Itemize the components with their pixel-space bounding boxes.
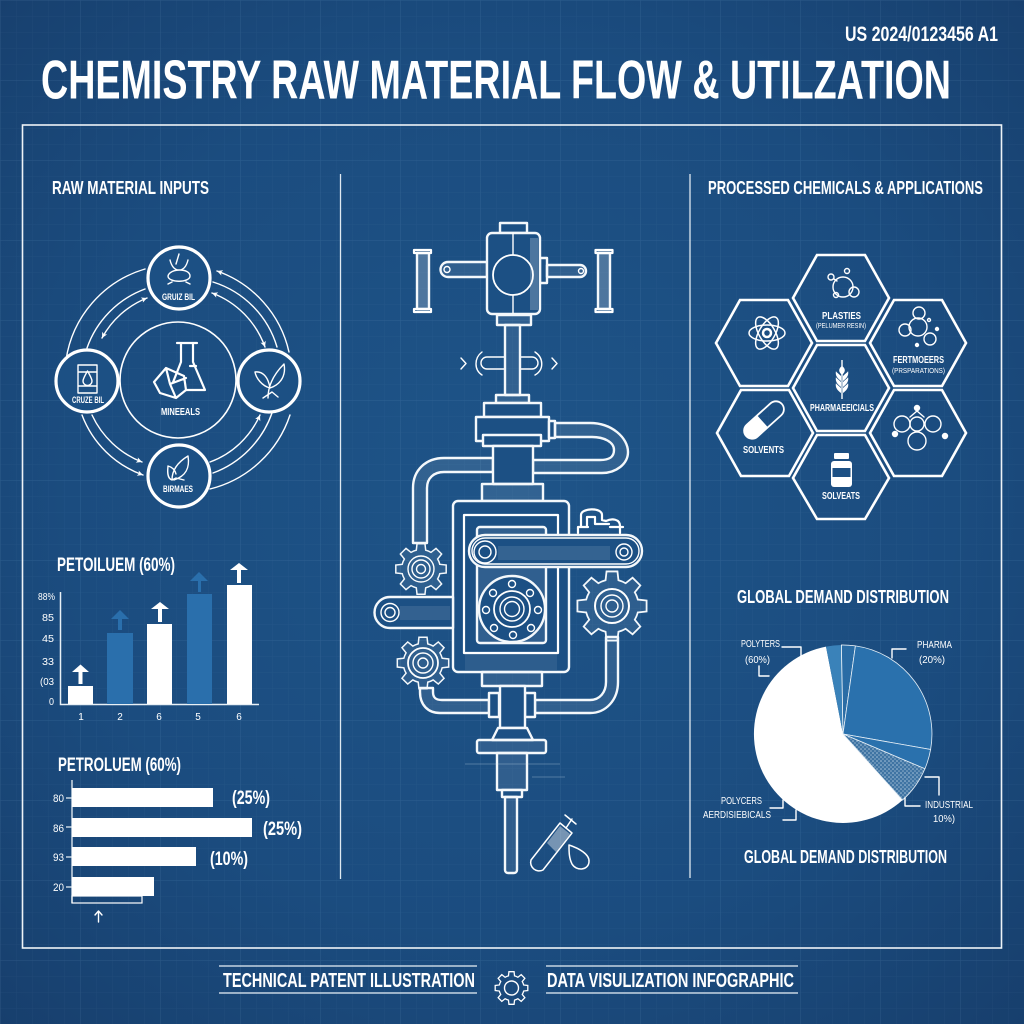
column divider left: [340, 174, 342, 879]
label: top node: GRUIZ BIL: [162, 292, 195, 302]
icon: flower atom: [168, 254, 190, 284]
neck column: [493, 446, 533, 484]
value labels: (10%): [210, 849, 248, 870]
axis labels: 20: [53, 882, 64, 894]
side columns: [414, 250, 612, 312]
y axis labels: 85: [42, 613, 54, 624]
slice: light blue: [826, 645, 843, 734]
label: industrial: 10%): [933, 813, 955, 825]
left belt: [374, 597, 453, 628]
central circle: minerals: [120, 322, 236, 438]
y axis labels: 33: [42, 657, 54, 668]
panel: raw material inputs: [52, 177, 300, 507]
label: polycers: [703, 795, 771, 821]
slice: small blue: [841, 645, 855, 734]
icon: test tube: [531, 815, 576, 871]
value labels: (25%): [232, 788, 270, 809]
column divider right: [689, 174, 691, 878]
gear: right: [577, 571, 647, 641]
outlined small bar: [72, 896, 142, 903]
lower column: [477, 672, 546, 873]
hex: solvents bottle: [793, 435, 889, 519]
label: left node: CRUZE BIL: [72, 395, 104, 405]
slice: hatched industrial: [843, 734, 925, 800]
label: polycers: AERDISIEBICALS: [703, 809, 771, 821]
cycle diagram: [56, 247, 300, 507]
bars: [72, 788, 252, 896]
axis labels: 93: [53, 852, 64, 864]
hex: atom: [716, 300, 812, 386]
slice: pharma: [843, 646, 932, 750]
main housing: [453, 501, 569, 672]
icon: drop: [569, 845, 589, 869]
chart: vertical bars: [38, 554, 259, 723]
label: pharma: PHARMA: [917, 639, 952, 651]
x axis labels: 1: [78, 712, 84, 723]
icon: atom: [749, 313, 785, 353]
cycle arcs and arrows: [66, 269, 290, 489]
upper flange: [476, 395, 555, 446]
small right pipes: [578, 509, 623, 533]
gear: lower left: [397, 637, 449, 689]
leaders: [759, 647, 939, 820]
icon: wheat: [836, 360, 848, 399]
x axis labels: 6: [236, 712, 242, 723]
footer: [219, 966, 798, 1004]
icon: leaf: [168, 456, 188, 480]
pie labels and leaders: [703, 638, 973, 825]
footer label left: [219, 966, 477, 993]
top valve: [441, 223, 586, 325]
chart: horizontal bars: [53, 754, 302, 922]
gear: upper left: [396, 544, 446, 594]
hex: plastics: [793, 255, 889, 341]
footer label left: TECHNICAL PATENT ILLUSTRATION: [223, 969, 475, 992]
value labels: [210, 788, 302, 870]
y axis labels: 0: [49, 697, 54, 708]
y axis labels: (03: [40, 677, 54, 688]
node: right biomass plant: [238, 350, 300, 412]
x axis labels: 5: [195, 712, 201, 723]
icon: ring molecule: [899, 307, 938, 346]
flywheel disc: [479, 576, 545, 642]
footer label right: [546, 966, 798, 993]
chart title: PETOILUEM (60%): [57, 554, 175, 576]
y axis labels: 45: [42, 634, 54, 645]
axis labels: 86: [53, 823, 64, 835]
hex: pharmaceuticals: [793, 345, 889, 431]
right loop pipe: [533, 423, 628, 473]
icon: oil barrel: [78, 365, 97, 393]
left pipe: [413, 458, 493, 543]
sublabel: (PRSPARATIONS): [892, 366, 945, 375]
hex: solvents capsule: [717, 390, 813, 476]
x axis labels: 2: [117, 712, 123, 723]
label: pharma: [917, 639, 952, 666]
slice: white polymers: [754, 647, 902, 823]
label: industrial: INDUSTRIAL: [925, 799, 973, 811]
stem and bracket: [461, 325, 557, 395]
label: polyters: [741, 638, 780, 666]
main frame: [22, 125, 1002, 948]
label: polyters: (60%): [745, 654, 770, 666]
bars: [68, 585, 252, 704]
central process machine: [374, 223, 647, 873]
node: left crude oil: [56, 350, 118, 412]
axis labels: 80: [53, 793, 64, 805]
slice: blue wedge: [843, 734, 931, 769]
axes: [60, 592, 259, 704]
label: PLASTIES: [822, 310, 861, 322]
node: bottom biomass: [148, 445, 210, 507]
node: top crude oil: [148, 247, 210, 309]
upper belt: [469, 535, 642, 567]
label: PHARMAEEICIALS: [810, 403, 874, 414]
pie chart: [754, 645, 932, 823]
icon: footer gear: [495, 972, 528, 1004]
faint dimension strokes: [465, 764, 565, 777]
value labels: (25%): [263, 819, 302, 840]
label: SOLVEATS: [822, 491, 860, 502]
lower pipe network: [420, 637, 618, 717]
x axis labels: [78, 712, 242, 723]
label: pharma: (20%): [919, 654, 945, 666]
hexagon cluster: [716, 255, 966, 519]
icon: network: [892, 406, 948, 450]
icon: capsule: [741, 398, 787, 442]
panel: processed chemicals: [708, 177, 983, 519]
axis and ticks: [66, 780, 72, 903]
label: SOLVENTS: [743, 445, 784, 456]
sublabel: (PELUMER RESIN): [816, 321, 866, 330]
footer label right: DATA VISULIZATION INFOGRAPHIC: [547, 969, 794, 992]
hex: molecule network: [870, 390, 966, 476]
label: minerals: MINEEALS: [161, 406, 200, 418]
label: FERTMOEERS: [893, 355, 944, 366]
icon: molecule: [828, 268, 859, 298]
icon: bottle: [831, 453, 852, 487]
label: bottom node: BIRMAES: [163, 484, 193, 495]
x axis labels: 6: [156, 712, 162, 723]
y axis labels: 88%: [38, 592, 55, 603]
small arrow: [95, 911, 102, 922]
y axis labels: [38, 592, 55, 708]
icon: flask: [170, 343, 205, 390]
label: polycers: POLYCERS: [721, 795, 762, 807]
hex: fertilizers: [870, 300, 966, 386]
heading: raw material inputs: RAW MATERIAL INPUTS: [52, 177, 209, 198]
icon: mineral rock: [154, 368, 186, 398]
bar arrows: [72, 563, 248, 684]
icon: sprout: [255, 364, 284, 398]
label: industrial: [925, 799, 973, 825]
neck block: [482, 484, 543, 501]
label: polyters: POLYTERS: [741, 638, 780, 650]
chart title: PETROLUEM (60%): [58, 754, 181, 776]
axis labels: [53, 793, 64, 894]
